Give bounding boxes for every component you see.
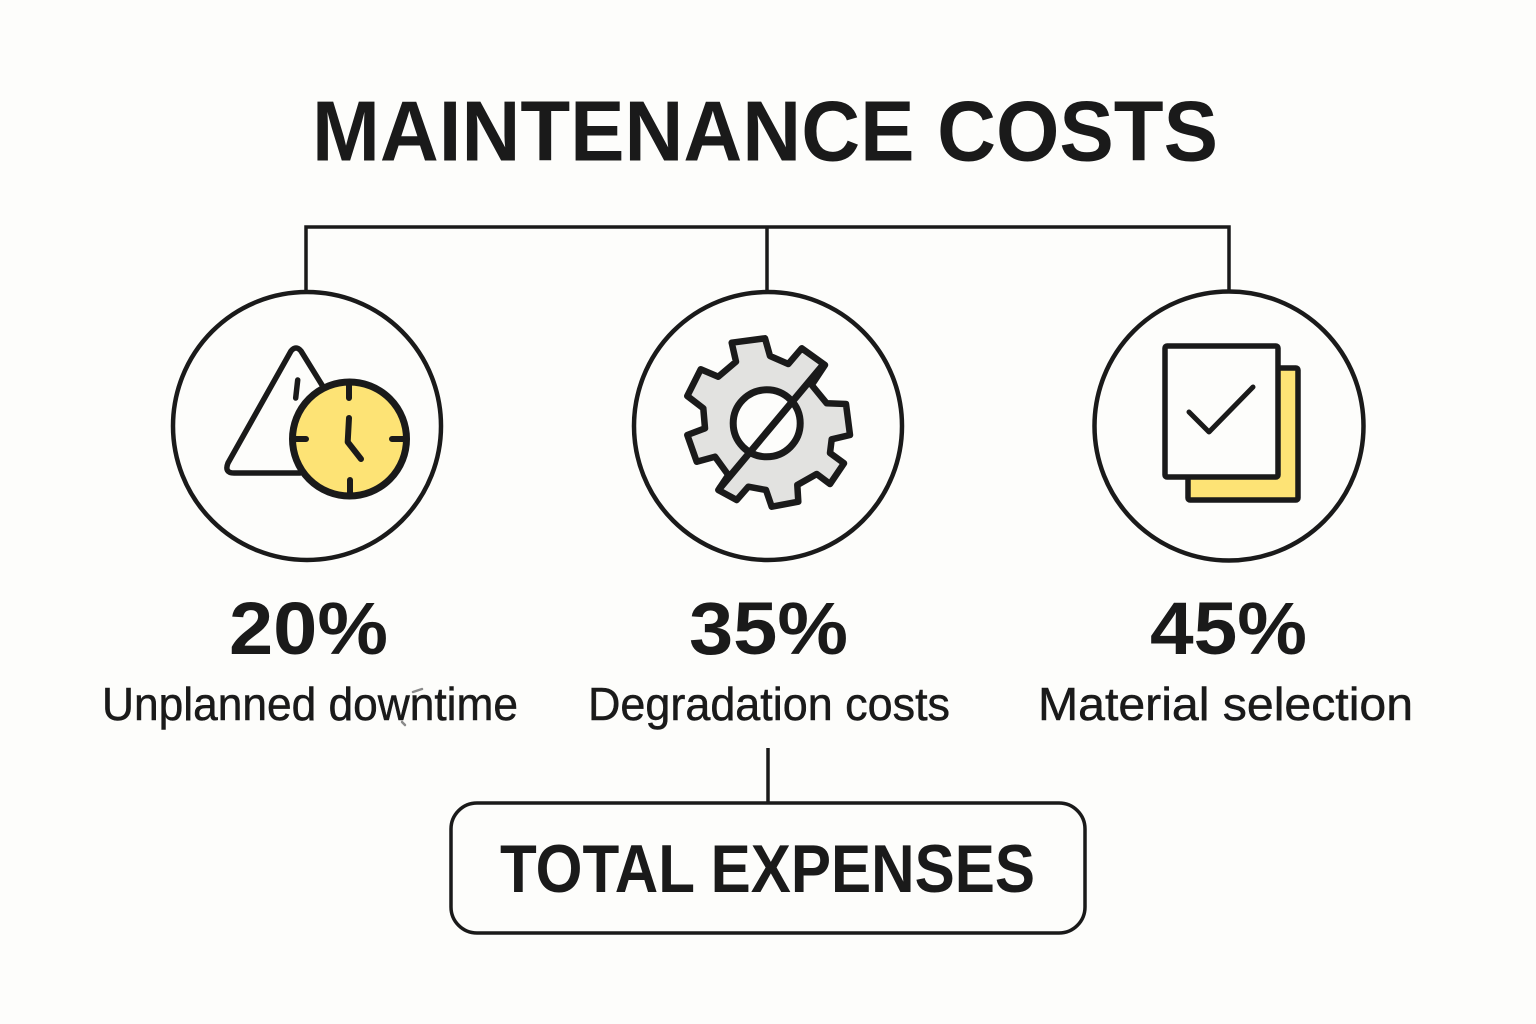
connector bracket xyxy=(306,227,1229,292)
circle: degradation costs xyxy=(634,292,902,560)
icon: slashed gear xyxy=(687,338,850,507)
total expenses label: TOTAL EXPENSES xyxy=(500,831,1035,907)
stat: 45%: 45% xyxy=(1150,587,1307,670)
total expenses box xyxy=(451,803,1085,933)
label: degradation costs: Degradation costs xyxy=(588,678,950,730)
title: MAINTENANCE COSTS xyxy=(312,84,1218,180)
panel: unplanned downtime xyxy=(102,292,518,730)
stat: 35%: 35% xyxy=(689,587,848,670)
icon: checked documents xyxy=(1165,346,1298,500)
panel: material selection xyxy=(1038,292,1413,730)
label: unplanned downtime: Unplanned downtime xyxy=(102,678,518,730)
circle: unplanned downtime xyxy=(173,292,441,560)
panel: degradation costs xyxy=(588,292,950,730)
connector to total xyxy=(766,748,770,803)
stat: 20%: 20% xyxy=(229,587,388,670)
circle: material selection xyxy=(1094,292,1364,560)
icon: warning triangle with clock xyxy=(227,348,406,496)
smudge on label xyxy=(402,689,422,725)
label: material selection: Material selection xyxy=(1038,678,1413,730)
